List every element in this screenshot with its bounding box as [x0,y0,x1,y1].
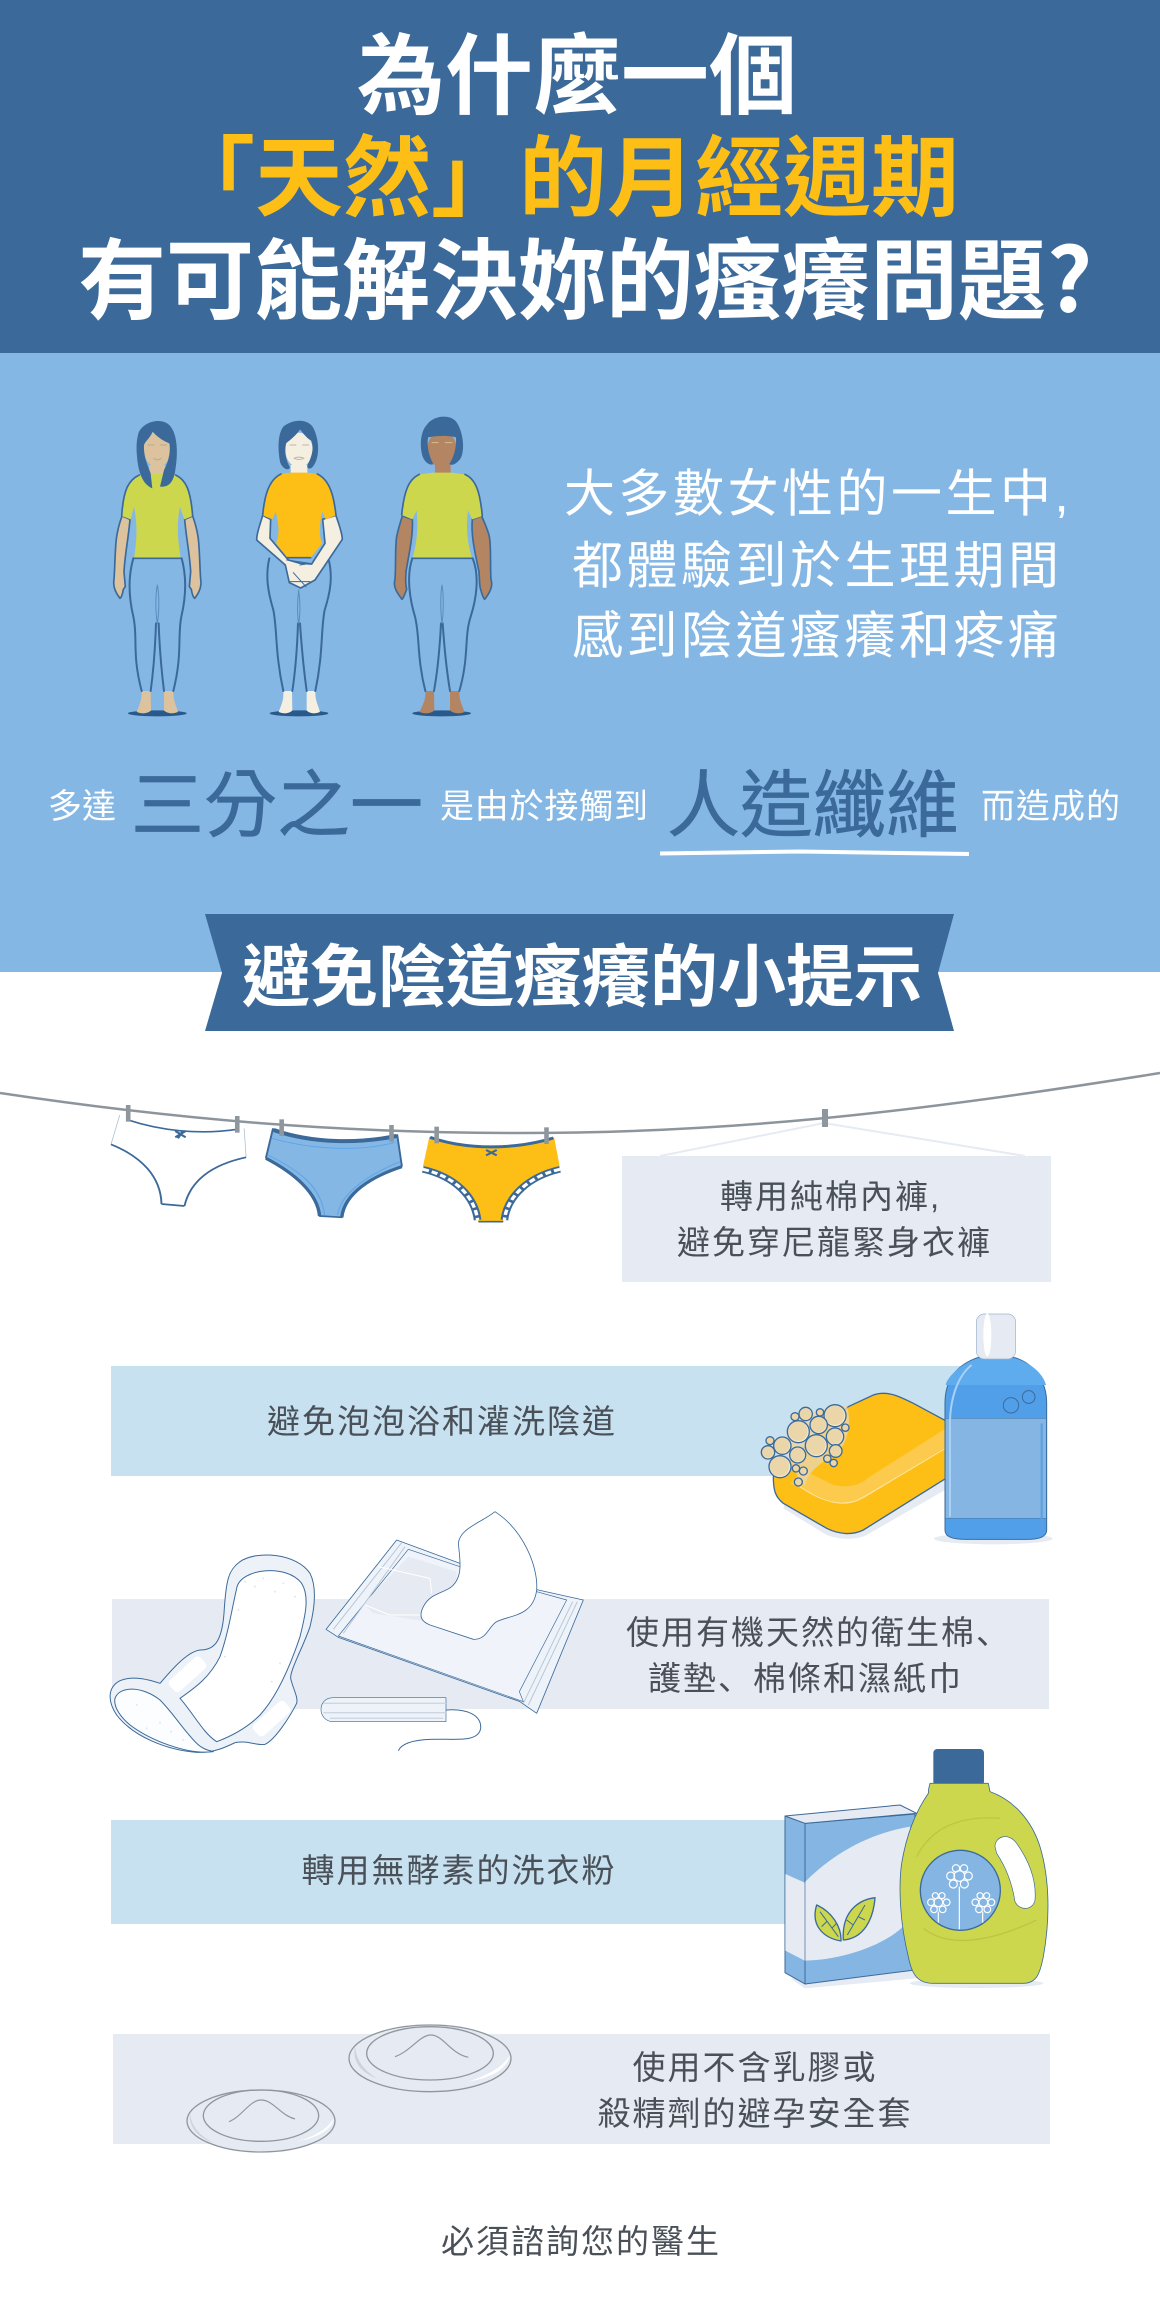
text block: consult your doctor: 必須諮詢您的醫生 [441,2223,721,2260]
icon: sanitary pad [110,1555,314,1752]
text block: one third caused by synthetic fibres: 人造纖維 [667,766,959,846]
text block: one third caused by synthetic fibres: 三分之一 [131,766,423,846]
banner: tips heading: 避免陰道瘙癢的小提示 [242,940,922,1016]
title line 2: 「天然」的月經週期 [167,129,959,228]
figure: woman one [114,421,201,716]
panel: tip 4 laundry powder: 轉用無酵素的洗衣粉 [302,1852,616,1889]
panel: tip 3 organic products [112,1599,1049,1709]
panel: tip 1 cotton underwear [622,1109,1051,1282]
icon: powder box [785,1805,917,1988]
panel: tip 2 avoid bubble bath: 避免泡泡浴和灌洗陰道 [267,1403,617,1440]
icon: tampon [321,1698,481,1751]
panel: tip 3 organic products: 護墊、棉條和濕紙巾 [648,1660,963,1697]
panel: tip 5 latex free condoms: 使用不含乳膠或 [632,2049,878,2086]
illustration: underwear on line [111,1105,560,1222]
panel: intro [0,353,1160,972]
icon: yellow lace briefs [423,1137,560,1222]
text block: lifetime statement: 都體驗到於生理期間 [572,538,1063,594]
illustration: laundry powder and detergent [785,1749,1048,1988]
text block: one third caused by synthetic fibres: 是由於接觸到 [440,788,649,826]
panel: tip 1 cotton underwear: 避免穿尼龍緊身衣褲 [677,1224,992,1261]
text block: one third caused by synthetic fibres: 而造成的 [981,788,1121,826]
icon: condom small [187,2090,335,2152]
panel: header [0,0,1160,353]
illustration: three women [114,417,492,716]
text block: one third caused by synthetic fibres: 多達 [48,788,116,826]
text block: one third caused by synthetic fibres [48,766,1121,854]
title line 1: 為什麼一個 [357,27,797,126]
panel: tip 2 avoid bubble bath [111,1366,971,1476]
illustration: soap and bottle [761,1313,1053,1544]
text block: lifetime statement: 感到陰道瘙癢和疼痛 [572,608,1063,664]
icon: soap bubbles [761,1405,849,1486]
illustration: clothes line [0,1073,1160,1133]
illustration: condoms [187,2025,511,2152]
icon: wipes pack [326,1512,583,1713]
text block: lifetime statement: 大多數女性的一生中, [564,466,1072,522]
illustration: pad, wipes and tampon [110,1512,583,1752]
title line 3: 有可能解決妳的瘙癢問題? [78,211,1092,338]
icon: cleanser bottle [934,1313,1053,1544]
icon: clothes pegs [126,1105,549,1144]
icon: condom large [349,2025,511,2092]
panel: tip 4 laundry powder [111,1820,791,1924]
figure: woman two [257,421,342,716]
icon: white briefs [111,1115,246,1206]
icon: detergent bottle [900,1749,1048,1988]
figure: woman three [394,417,492,716]
icon: cotton flowers [928,1865,995,1929]
panel: tip 5 latex free condoms: 殺精劑的避孕安全套 [598,2095,912,2132]
panel: tip 1 cotton underwear: 轉用純棉內褲, [720,1178,941,1215]
icon: blue briefs [266,1129,402,1217]
panel: tip 5 latex free condoms [113,2034,1050,2144]
icon: soap [773,1393,957,1539]
banner: tips heading [205,914,954,1031]
text block: lifetime statement [564,466,1072,664]
panel: tip 3 organic products: 使用有機天然的衛生棉、 [626,1614,1011,1651]
